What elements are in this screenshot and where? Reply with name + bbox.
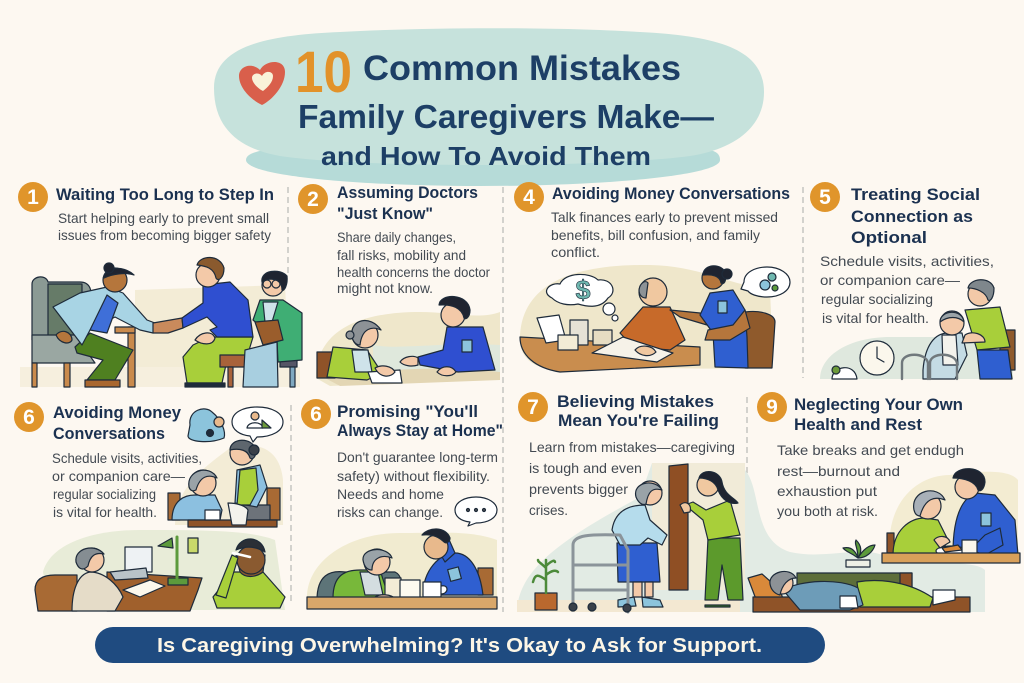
body 7 [529,439,735,518]
body 9: you both at risk. [777,503,878,519]
footer banner [95,627,825,663]
icon: heart [239,62,285,105]
number badge 4: 4 [523,186,535,209]
body 5: is vital for health. [822,310,929,326]
body 9: exhaustion put [777,483,877,499]
icon: dollar sign: $ [575,275,591,305]
number badge 6b [301,399,331,429]
number badge 6b: 6 [310,403,322,426]
heading 7: Believing Mistakes [557,392,714,411]
body 9: rest—burnout and [777,463,900,479]
body 7: crises. [529,502,568,518]
heading 7 [557,392,719,430]
number badge 1: 1 [27,186,39,209]
body 2 [337,229,490,296]
body 4: Talk finances early to prevent missed [551,209,778,225]
body 6: Schedule visits, activities, [52,450,202,466]
illustration 9 top: meal together [882,469,1020,563]
body 6 [52,450,202,520]
panel: 1 waiting too long [18,182,302,387]
illustration 6 bottom: man at desk and man with glasses [35,530,285,611]
body 1 [58,210,271,243]
heading 7: Mean You're Failing [558,411,719,430]
illustration 6 top: worried figure and companion visit [168,407,283,527]
body 6: regular socializing [53,486,156,502]
body 5: or companion care— [820,272,960,288]
number badge 5: 5 [819,186,831,209]
body 2: might not know. [337,280,433,296]
illustration 5: companion care with clock and walker [820,280,1015,379]
body 6b [337,449,498,520]
number badge 6: 6 [23,406,35,429]
number badge 2 [298,184,328,214]
heading 4: Avoiding Money Conversations [552,184,790,203]
heading 6 [53,403,182,443]
icon: plant [843,540,875,567]
heading 6b [337,402,503,440]
icon: speech bubble [455,497,497,526]
panel: 4 avoiding money conversations [514,182,790,372]
body 6b: safety) without flexibility. [337,468,490,484]
number badge 7: 7 [527,396,539,419]
body 5: regular socializing [821,291,933,307]
heading 5: Optional [851,228,927,247]
body 6: or companion care— [52,468,185,484]
number badge 1 [18,182,48,212]
body 7: prevents bigger [529,481,628,497]
body 5: Schedule visits, activities, [820,253,994,269]
body 6b: risks can change. [337,504,443,520]
background wave 7 and 9 [517,463,985,612]
body 9 [777,442,964,519]
body 5 [820,253,994,326]
heading 6b: Always Stay at Home" [337,421,503,440]
title line 3: and How To Avoid Them [321,141,651,171]
body 1: Start helping early to prevent small [58,210,269,226]
title number: 10 [295,40,352,105]
heading 9 [794,395,963,434]
illustration 9 bottom: exhausted person on sofa [748,571,970,612]
body 1: issues from becoming bigger safety [58,227,271,243]
title line 2: Family Caregivers Make— [298,98,714,135]
illustration 1: caregivers helping woman from chair [20,257,302,387]
heading 1: Waiting Too Long to Step In [56,185,274,204]
body 7: Learn from mistakes—caregiving [529,439,735,455]
panel: 5 treating social connection [810,182,1015,379]
heading 2: Assuming Doctors [337,183,478,202]
number badge 9 [757,392,787,422]
title line 1: Common Mistakes [363,49,681,88]
body 2: fall risks, mobility and [337,247,466,263]
number badge 4 [514,182,544,212]
illustration 4: money talk at table [520,265,790,372]
body 6b: Don't guarantee long-term [337,449,498,465]
body 6b: Needs and home [337,486,444,502]
number badge 5 [810,182,840,212]
body 4: benefits, bill confusion, and family [551,227,760,243]
heading 2: "Just Know" [337,204,433,223]
number badge 6 [14,402,44,432]
number badge 9: 9 [766,396,778,419]
panel: 6 promising stay at home [301,399,503,609]
panel: 2 assuming doctors [298,183,500,386]
heading 5: Treating Social [851,185,980,204]
heading 5 [851,185,980,247]
heading 6: Conversations [53,424,165,443]
body 2: Share daily changes, [337,229,456,245]
number badge 2: 2 [307,188,319,211]
heading 9: Health and Rest [794,415,922,434]
panel: 9 neglecting your health [748,392,1020,612]
body 9: Take breaks and get endugh [777,442,964,458]
illustration 2: woman and helper at table [316,297,500,386]
title banner [214,28,764,186]
body 4: conflict. [551,244,600,260]
illustration 6b: woman and worried man at table [307,529,497,609]
panel: 7 believing mistakes [517,392,985,612]
heading 6: Avoiding Money [53,403,182,422]
number badge 7 [518,392,548,422]
body 7: is tough and even [529,460,642,476]
heading 5: Connection as [851,207,973,226]
body 2: health concerns the doctor [337,264,490,280]
illustration 7: older woman with walker at door [533,463,745,612]
body 4 [551,209,778,260]
heading 9: Neglecting Your Own [794,395,963,414]
body 6: is vital for health. [53,504,157,520]
heading 6b: Promising "You'll [337,402,478,421]
footer banner: Is Caregiving Overwhelming? It's Okay to Ask for Support. [157,635,762,657]
heading 2 [337,183,478,223]
panel: 6 avoiding money conversations repeat [14,402,285,611]
